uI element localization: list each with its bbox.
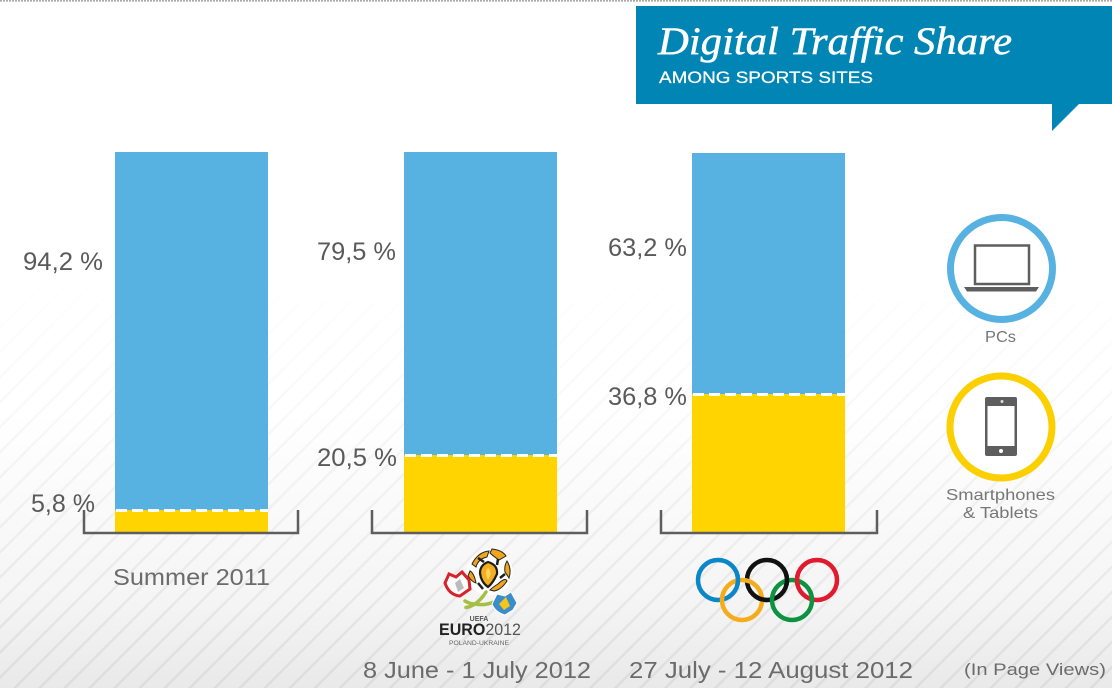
bracket [372, 510, 587, 533]
banner: Digital Traffic Share [636, 6, 1112, 131]
panel: Olympics column [608, 153, 913, 683]
label: PCs [985, 329, 1016, 346]
ball [466, 549, 512, 595]
icon: yellow ring [950, 376, 1052, 478]
bar: smartphones 5,8 % [115, 510, 268, 532]
caption: 27 July - 12 August 2012 [629, 657, 913, 683]
bar: PCs 94,2 % [115, 152, 268, 510]
label: 36,8 %: 36,8 % [608, 383, 687, 411]
label: 94,2 %: 94,2 % [23, 248, 103, 276]
bar: PCs 79,5 % [404, 152, 557, 455]
POLAND-UKRAINE text: POLAND-UKRAINE [449, 641, 509, 647]
bar: smartphones 36,8 % [692, 394, 845, 532]
icon: Euro 2012 logo [439, 549, 521, 647]
footnote: (In Page Views) [964, 660, 1106, 679]
bracket [84, 510, 298, 533]
icon: blue ring [950, 218, 1052, 320]
label: Smartphones [946, 487, 1055, 504]
red tulip [445, 572, 470, 596]
icon: laptop [964, 246, 1039, 292]
legend: PCs [950, 218, 1052, 346]
label: 63,2 %: 63,2 % [608, 234, 687, 262]
label: 20,5 %: 20,5 % [317, 444, 397, 472]
legend: Smartphones and Tablets: & Tablets [963, 505, 1038, 522]
label: 5,8 %: 5,8 % [31, 490, 95, 518]
title: Digital Traffic Share [657, 20, 1012, 63]
bar: smartphones 20,5 % [404, 455, 557, 532]
bar: PCs 63,2 % [692, 153, 845, 394]
stem [465, 592, 494, 608]
panel: Euro 2012 column [317, 152, 591, 683]
caption: 8 June - 1 July 2012 [363, 657, 591, 683]
label: 79,5 %: 79,5 % [317, 238, 396, 266]
UEFA text: UEFA [470, 616, 488, 623]
subtitle: AMONG SPORTS SITES [659, 68, 873, 87]
panel: Summer 2011 column [23, 152, 298, 590]
icon: Olympic rings [698, 560, 837, 620]
bracket [661, 510, 877, 533]
icon: phone [985, 397, 1017, 456]
blue flower [492, 592, 517, 615]
caption: Summer 2011 [113, 564, 270, 590]
legend: Smartphones and Tablets [946, 376, 1055, 522]
EURO2012 text: EURO2012 [439, 620, 521, 639]
